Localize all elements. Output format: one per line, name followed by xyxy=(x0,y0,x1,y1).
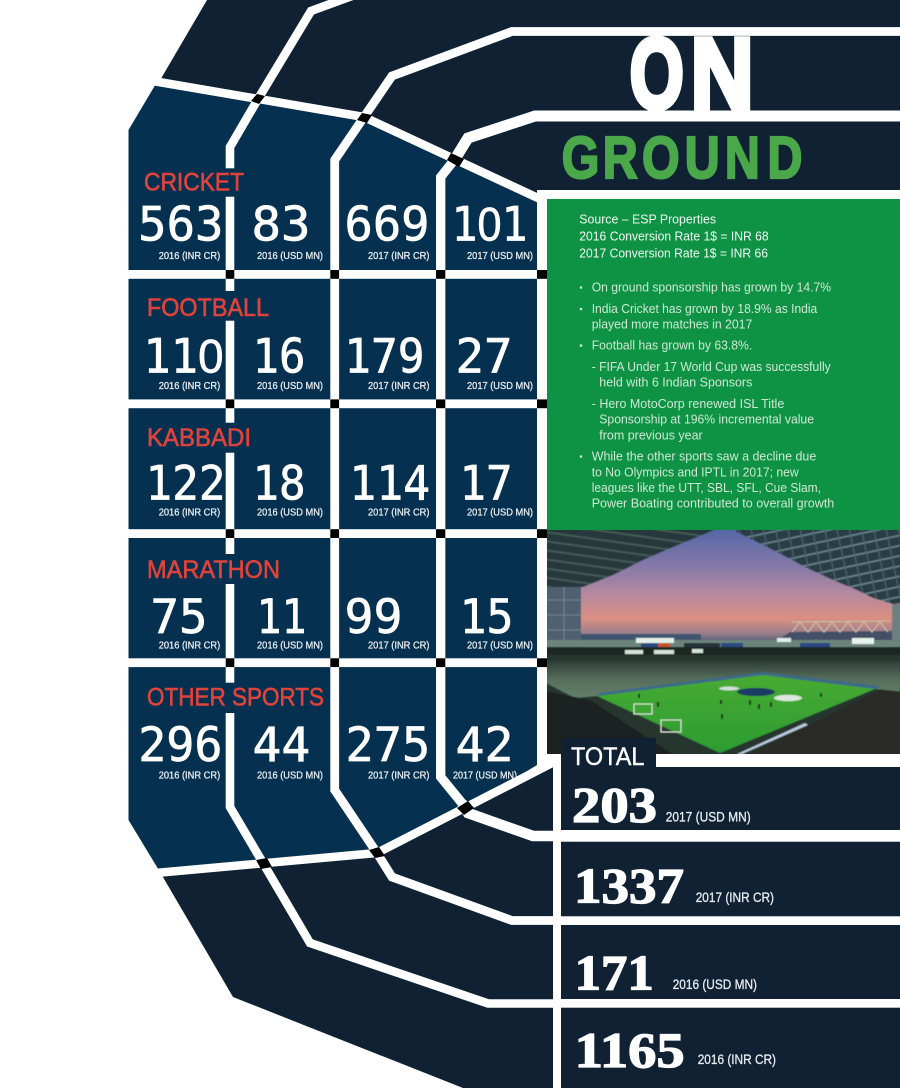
bullet list: held with 6 Indian Sponsors xyxy=(599,375,753,390)
heading: football: FOOTBALL xyxy=(147,294,269,322)
row: kabbadi: 2016 (USD MN) xyxy=(257,507,323,519)
row: marathon: 99 xyxy=(344,590,402,645)
upper stand xyxy=(159,0,900,197)
total: 1337 xyxy=(561,842,900,916)
row: other sports: 2016 (USD MN) xyxy=(257,769,323,781)
row: marathon: 75 xyxy=(150,590,208,645)
row: other sports: 2017 (USD MN) xyxy=(453,769,517,781)
bullet list: - Hero MotoCorp renewed ISL Title xyxy=(592,396,784,411)
title: ON: O xyxy=(630,18,684,130)
row: kabbadi: 2017 (USD MN) xyxy=(467,507,533,519)
row: marathon: 2016 (USD MN) xyxy=(257,640,323,652)
heading: cricket: CRICKET xyxy=(144,168,244,196)
row: football: 2017 (INR CR) xyxy=(368,380,430,392)
row: other sports: 275 xyxy=(346,718,430,773)
row: kabbadi: 2016 (INR CR) xyxy=(159,507,220,519)
row: football xyxy=(143,294,533,392)
row: kabbadi: 114 xyxy=(349,456,430,511)
bullet list: Football has grown by 63.8%. xyxy=(592,338,752,353)
total: 1165: 2016 (INR CR) xyxy=(698,1052,776,1067)
row: kabbadi xyxy=(146,424,533,519)
row: cricket: 669 xyxy=(344,198,430,253)
row: cricket: 2016 (USD MN) xyxy=(257,250,323,262)
heading: marathon: MARATHON xyxy=(147,556,280,584)
row: football: 179 xyxy=(344,330,424,385)
row: other sports: 296 xyxy=(138,718,222,773)
row: other sports: 2017 (INR CR) xyxy=(368,769,430,781)
row: cricket: 83 xyxy=(252,198,310,253)
total: 171: 171 xyxy=(575,944,654,1000)
row: cricket: 2016 (INR CR) xyxy=(159,250,220,262)
total: 203: 2017 (USD MN) xyxy=(666,810,751,825)
bullet list: Sponsorship at 196% incremental value xyxy=(599,412,814,427)
row: other sports: 44 xyxy=(252,718,310,773)
pitch-side blue panel xyxy=(128,82,537,872)
bullet list: Power Boating contributed to overall growth xyxy=(592,496,834,511)
title: ON: N xyxy=(691,18,754,130)
heading: kabbadi: KABBADI xyxy=(147,424,251,452)
tab: total xyxy=(561,738,656,771)
total: 1165: 1165 xyxy=(575,1022,685,1078)
row: cricket: 101 xyxy=(452,198,528,253)
heading: other sports: OTHER SPORTS xyxy=(147,684,324,712)
row: marathon: 2017 (INR CR) xyxy=(368,640,430,652)
bullet list: to No Olympics and IPTL in 2017; new xyxy=(592,464,799,479)
row: kabbadi: 122 xyxy=(146,456,226,511)
row: football: 2017 (USD MN) xyxy=(467,380,533,392)
lower stand xyxy=(160,763,553,1088)
row: other sports: 42 xyxy=(456,718,514,773)
total: 203: 203 xyxy=(572,776,657,832)
title: ON xyxy=(630,18,754,130)
bullet list: from previous year xyxy=(599,427,703,442)
row: football: 16 xyxy=(252,330,306,385)
row: marathon: 2017 (USD MN) xyxy=(467,640,533,652)
total: 171: 2016 (USD MN) xyxy=(673,977,757,992)
photo: stadium at dusk xyxy=(540,525,900,759)
row: marathon: 15 xyxy=(460,590,514,645)
row: marathon: 2016 (INR CR) xyxy=(159,640,220,652)
bullet list xyxy=(580,280,834,511)
bullet list: While the other sports saw a decline due xyxy=(592,449,816,464)
tab: total: TOTAL xyxy=(571,743,645,771)
row: cricket xyxy=(138,168,533,262)
total: 1165 xyxy=(561,1008,900,1088)
source text: Source – ESP Properties xyxy=(579,211,716,226)
bullet list: India Cricket has grown by 18.9% as India xyxy=(592,301,818,316)
row: football: 27 xyxy=(456,330,512,385)
source text: 2016 Conversion Rate 1$ = INR 68 xyxy=(579,229,769,244)
row: other sports: 2016 (INR CR) xyxy=(159,769,220,781)
row: kabbadi: 17 xyxy=(460,456,512,511)
source text xyxy=(579,211,769,261)
row: football: 110 xyxy=(143,330,224,385)
source text: 2017 Conversion Rate 1$ = INR 66 xyxy=(579,246,768,261)
row: other sports xyxy=(138,684,517,781)
total: 1337: 2017 (INR CR) xyxy=(696,890,774,905)
row: cricket: 2017 (USD MN) xyxy=(467,250,533,262)
row: marathon: 11 xyxy=(256,590,306,645)
panel: notes xyxy=(547,199,900,530)
row: cricket: 2017 (INR CR) xyxy=(368,250,430,262)
total: 1337: 1337 xyxy=(574,857,684,913)
total: 203 xyxy=(561,767,900,832)
row: kabbadi: 18 xyxy=(252,456,306,511)
bullet list: On ground sponsorship has grown by 14.7% xyxy=(592,280,831,295)
bullet list: played more matches in 2017 xyxy=(592,317,752,332)
bullet list: leagues like the UTT, SBL, SFL, Cue Slam, xyxy=(592,480,821,495)
row: football: 2016 (USD MN) xyxy=(257,380,323,392)
row: kabbadi: 2017 (INR CR) xyxy=(368,507,430,519)
total: 171 xyxy=(561,925,900,1000)
row: cricket: 563 xyxy=(138,198,224,253)
row: marathon xyxy=(147,556,533,652)
bullet list: - FIFA Under 17 World Cup was successfully xyxy=(592,359,831,374)
title: GROUND: GROUND xyxy=(562,126,802,191)
row: football: 2016 (INR CR) xyxy=(159,380,220,392)
